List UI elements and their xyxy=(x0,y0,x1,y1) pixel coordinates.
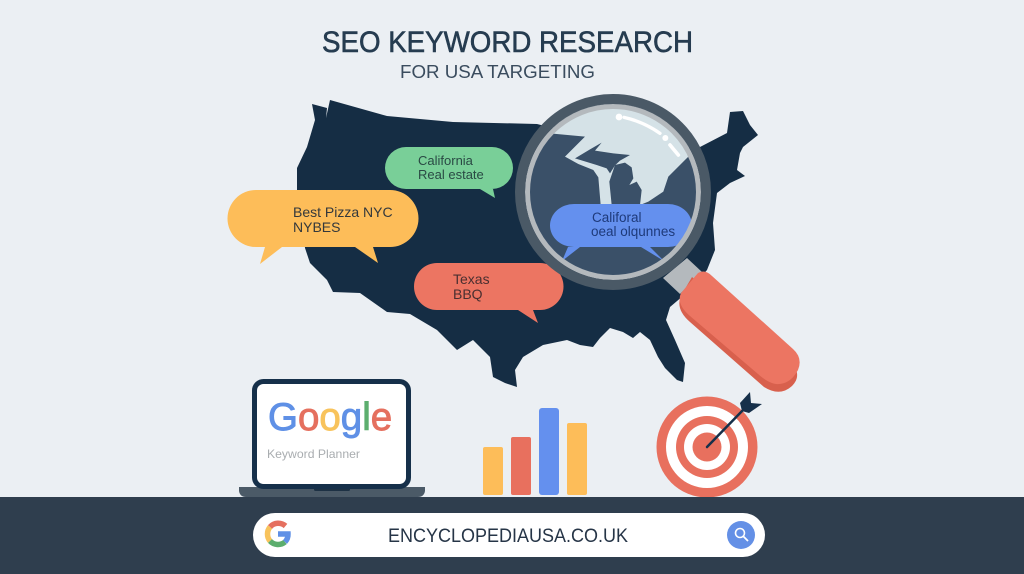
lens ring xyxy=(528,106,698,278)
speech bubble: Califoral in lens: Califoral xyxy=(592,210,642,225)
speech bubble: California Real estate: Real estate xyxy=(418,167,484,182)
icon: search button xyxy=(727,521,755,549)
lens interior xyxy=(525,104,701,280)
laptop: Google Keyword Planner xyxy=(239,382,425,497)
magnifier handle xyxy=(679,272,800,392)
subtitle: FOR USA TARGETING xyxy=(400,62,595,82)
footer bar xyxy=(0,497,1024,574)
speech bubble: Texas BBQ: Texas xyxy=(453,271,490,287)
laptop base xyxy=(239,487,425,497)
icon: target with arrow xyxy=(656,392,762,498)
lens highlight xyxy=(624,117,678,155)
speech bubble: Califoral in lens: oeal olqunnes xyxy=(591,224,675,239)
speech bubble: California Real estate: California xyxy=(418,153,474,168)
speech bubble: Texas BBQ: BBQ xyxy=(453,286,483,302)
USA map silhouette xyxy=(297,100,758,387)
speech bubble: California Real estate xyxy=(385,147,513,198)
speech bubble: Best Pizza NYC xyxy=(227,190,418,264)
icon: Google G xyxy=(267,523,288,544)
lens land and lakes xyxy=(554,109,688,204)
bar chart xyxy=(483,408,587,495)
search bar xyxy=(253,513,765,557)
speech bubble: Best Pizza NYC: NYBES xyxy=(293,219,340,235)
magnifying glass xyxy=(520,90,800,392)
title: SEO KEYWORD RESEARCH xyxy=(322,26,693,59)
speech bubble: Texas BBQ xyxy=(414,263,564,323)
search bar text: ENCYCLOPEDIAUSA.CO.UK xyxy=(388,526,628,547)
magnifier neck xyxy=(663,258,702,294)
speech bubble: Best Pizza NYC: Best Pizza NYC xyxy=(293,204,393,220)
laptop screen xyxy=(254,382,408,486)
speech bubble: Califoral in lens xyxy=(550,204,692,261)
Keyword Planner label: Keyword Planner xyxy=(267,447,360,461)
Google logo: Google xyxy=(268,396,392,439)
